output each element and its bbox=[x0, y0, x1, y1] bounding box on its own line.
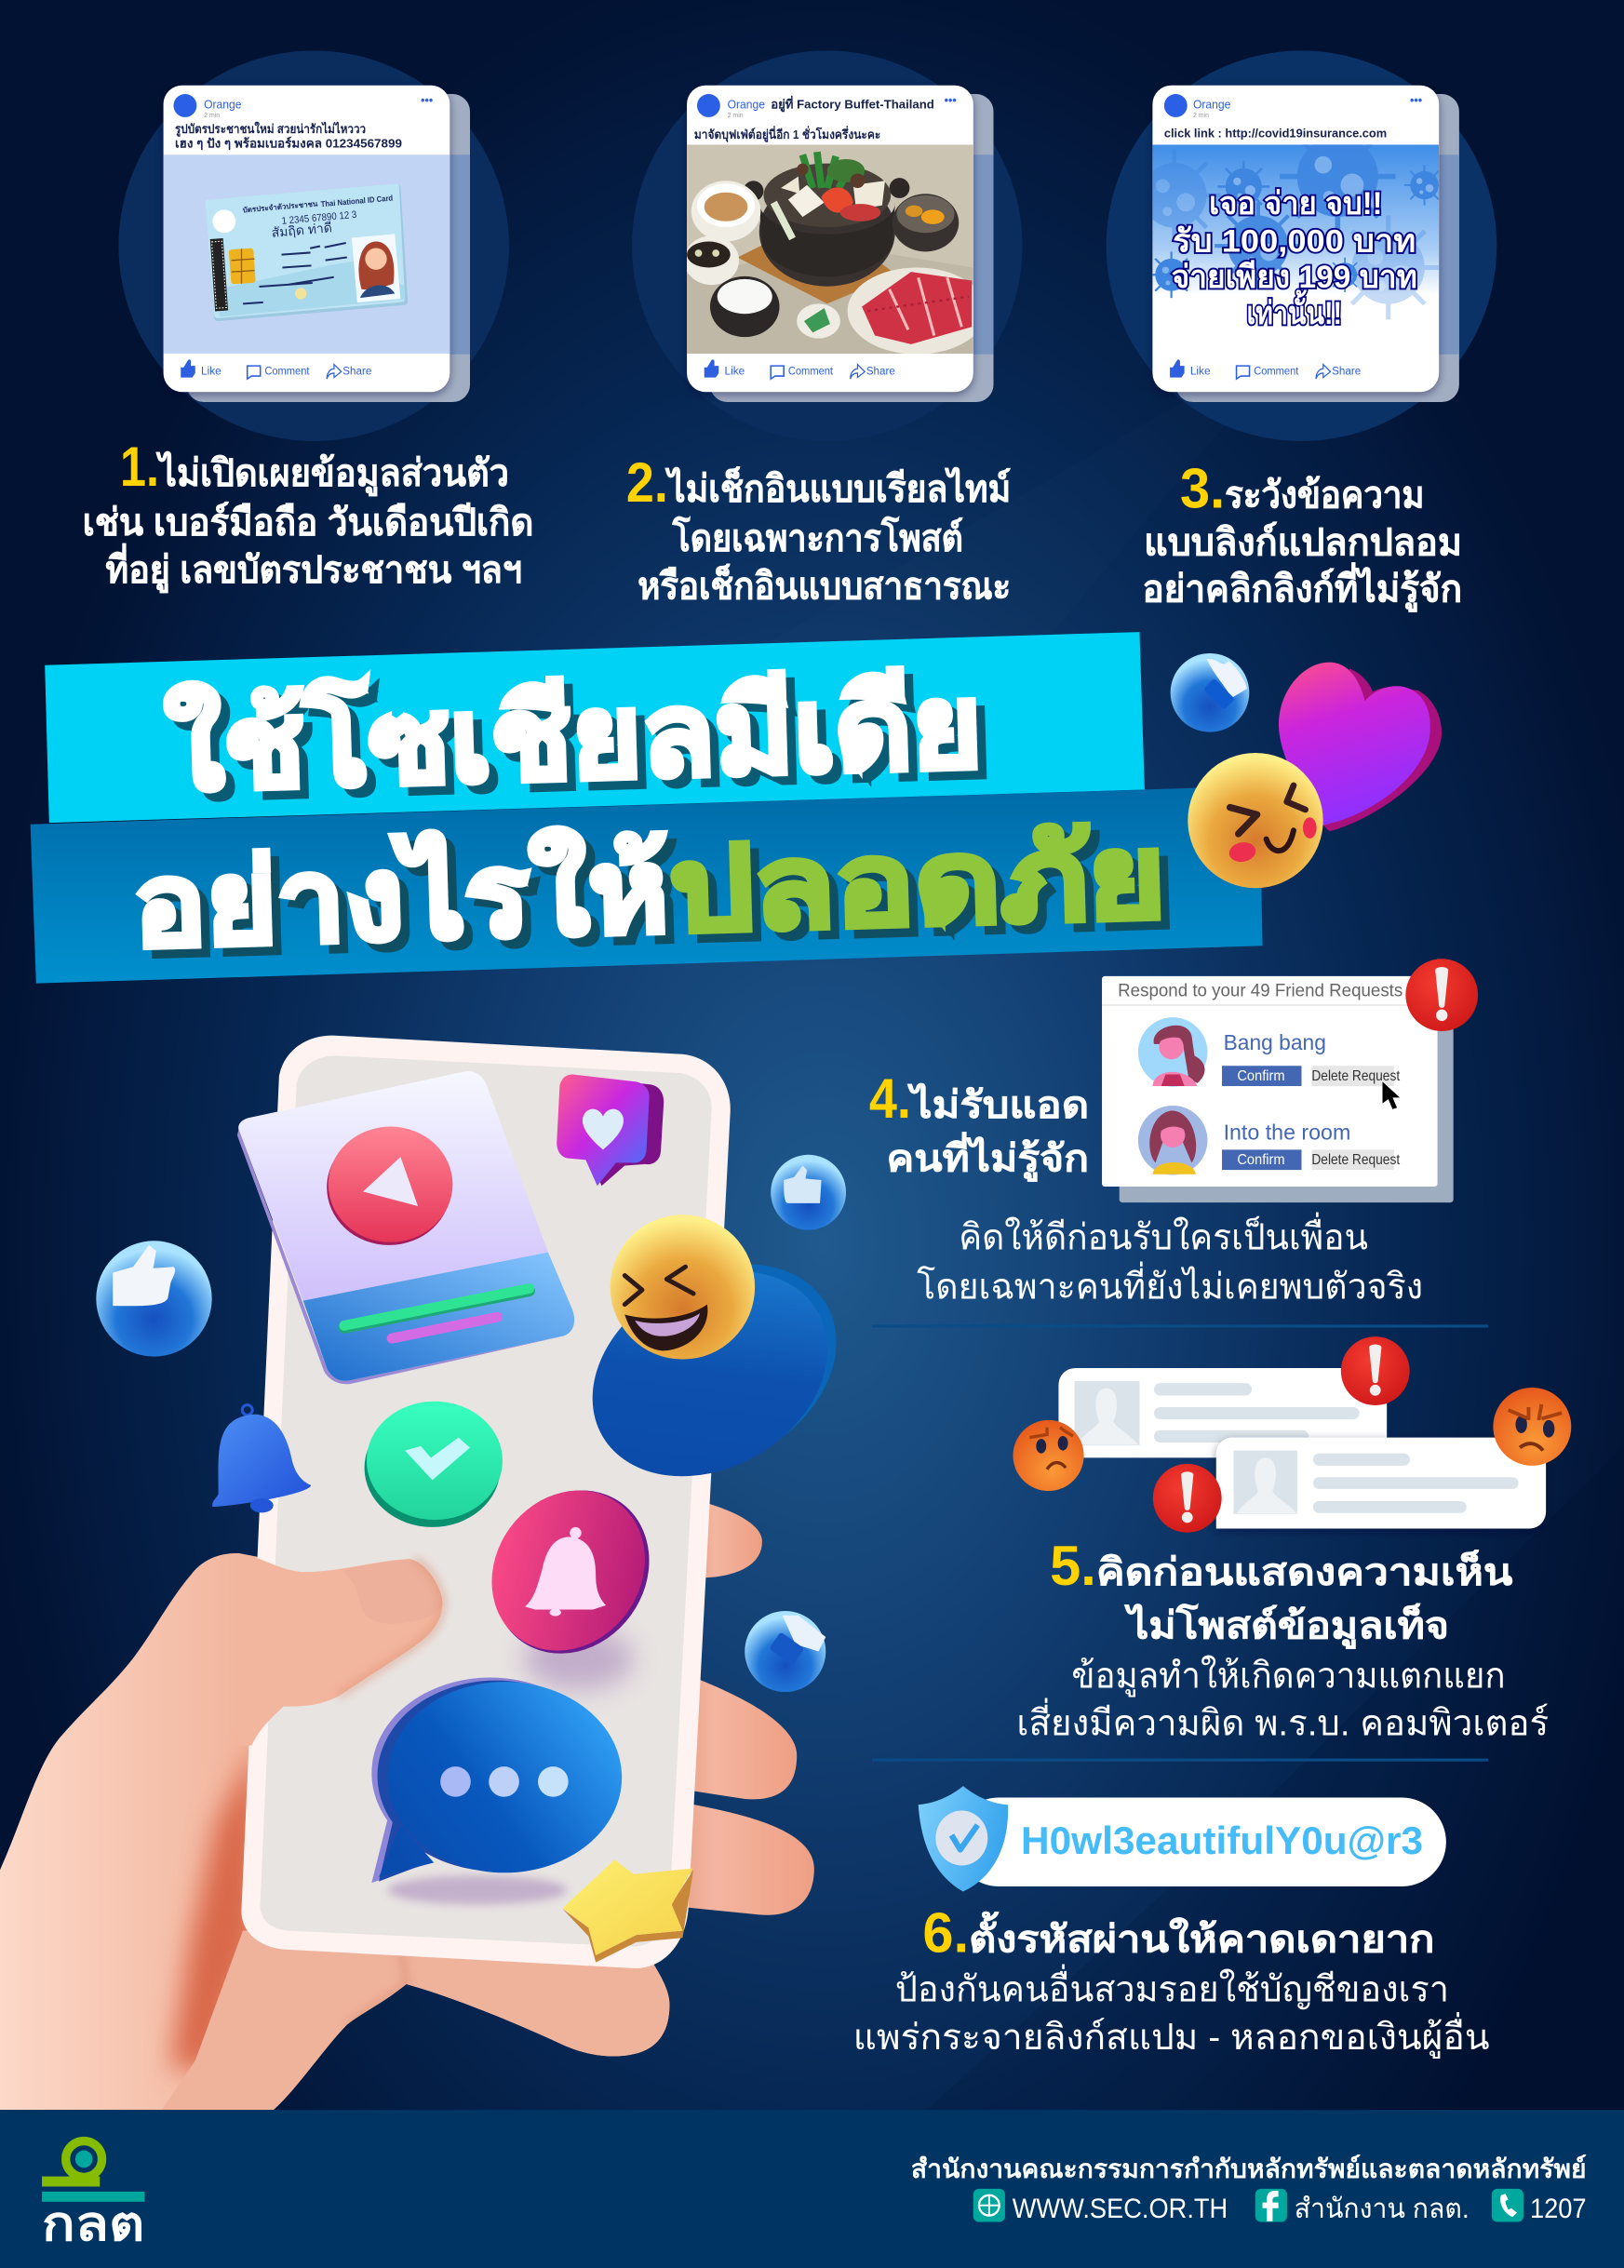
post card 2: food buffet post: Share bbox=[866, 365, 895, 377]
post card 3: fake insurance link post: 2 min bbox=[1193, 113, 1209, 119]
tip 5 text: ข้อมูลทำให้เกิดความแตกแยก bbox=[1071, 1655, 1506, 1697]
icon: facebook bbox=[1255, 2189, 1287, 2222]
icon: angry emoji bbox=[1493, 1388, 1571, 1466]
icon: like ball top right bbox=[771, 1155, 846, 1230]
tip 1 text bbox=[83, 435, 533, 594]
post card 3: fake insurance link post: click link : http://covid19insurance.com bbox=[1164, 127, 1387, 141]
password pill: H0wl3eautifulY0u@r3 bbox=[1021, 1818, 1423, 1862]
tip 5 text: ไม่โพสต์ข้อมูลเท็จ bbox=[1124, 1603, 1449, 1650]
icon: alert badge 1 bbox=[1341, 1336, 1410, 1405]
post card 3: fake insurance link post: Like bbox=[1190, 365, 1211, 377]
tip 5 text: คิดก่อนแสดงความเห็น bbox=[1096, 1549, 1513, 1593]
post card 2: food buffet post: Orange bbox=[728, 99, 765, 112]
tip 2 text: 2. bbox=[626, 450, 668, 514]
banner: title second line: อย่างไรให้ bbox=[131, 825, 670, 971]
post card 1: ID card post: Comment bbox=[264, 365, 310, 377]
avatar: first requester bbox=[1138, 1017, 1207, 1087]
tip 6 text: แพร่กระจายลิงก์สแปม - หลอกขอเงินผู้อื่น bbox=[853, 2012, 1489, 2059]
tip 5 text: เสี่ยงมีความผิด พ.ร.บ. คอมพิวเตอร์ bbox=[1016, 1698, 1549, 1744]
icon: national ID card: บัตรประจำตัวประชาชน bbox=[242, 199, 318, 214]
panel: friend requests: Bang bang bbox=[1224, 1030, 1326, 1054]
icon: blue bell bbox=[212, 1405, 311, 1512]
tip 1 text: ไม่เปิดเผยข้อมูลส่วนตัว bbox=[155, 450, 509, 497]
panel: friend requests: Confirm bbox=[1237, 1152, 1285, 1168]
post card 2: food buffet post: ••• bbox=[945, 94, 957, 107]
panel: friend requests: Delete Request bbox=[1311, 1152, 1401, 1168]
post card 3: fake insurance link post: เจอ จ่าย จบ!! bbox=[1209, 186, 1383, 221]
post card 1: ID card post: Like bbox=[201, 365, 221, 377]
tip 1 text: เช่น เบอร์มือถือ วันเดือนปีเกิด bbox=[83, 501, 533, 544]
logo bbox=[42, 2141, 144, 2250]
banner: title first line: ใช้โซเชียลมีเดีย bbox=[163, 660, 984, 814]
post card 2: food buffet post: อยู่ที่ Factory Buffet-Thailand bbox=[771, 95, 934, 113]
post card 3: fake insurance link post: เท่านั้น!! bbox=[1246, 289, 1342, 331]
post card 2: food buffet post: Like bbox=[724, 365, 745, 377]
footer organisation name: สำนักงานคณะกรรมการกำกับหลักทรัพย์และตลาดหลักทรัพย์ bbox=[911, 2154, 1587, 2183]
icon: sad emoji bbox=[1013, 1420, 1084, 1491]
post card 1: ID card post: 2 min bbox=[204, 113, 220, 119]
icon: blue oval with laughing emoji bbox=[556, 1215, 874, 1517]
illustration: smartphone bbox=[241, 1036, 731, 1968]
tip 4 heading: คนที่ไม่รู้จัก bbox=[887, 1132, 1089, 1183]
facebook name: สำนักงาน กลต. bbox=[1295, 2194, 1470, 2224]
illustration: virus banner bbox=[1152, 144, 1439, 320]
icon: national ID card: สัมฤิด ท่าดี bbox=[271, 220, 332, 240]
post card 3: fake insurance link post: Orange bbox=[1193, 99, 1230, 112]
post card 1: ID card post: Orange bbox=[204, 99, 242, 112]
tip 5 text bbox=[1016, 1534, 1549, 1744]
icon: phone bbox=[1492, 2189, 1523, 2222]
tip 3 text bbox=[1143, 456, 1462, 612]
illustration: hot pot meal bbox=[684, 144, 986, 355]
icon: alert badge friend requests bbox=[1405, 959, 1478, 1031]
panel: friend requests bbox=[1102, 976, 1454, 1202]
avatar: second requester bbox=[1138, 1106, 1207, 1175]
tip 3 text: ระวังข้อความ bbox=[1225, 473, 1425, 516]
comment card 2 bbox=[1216, 1438, 1546, 1528]
panel: friend requests: Respond to your 49 Friend Requests bbox=[1118, 981, 1403, 1001]
panel: friend requests: Delete Request bbox=[1311, 1068, 1401, 1084]
post card 3: fake insurance link post: Share bbox=[1332, 365, 1361, 377]
tip 6 text: ป้องกันคนอื่นสวมรอยใช้บัญชีของเรา bbox=[895, 1965, 1449, 2010]
post card 2: food buffet post: Comment bbox=[788, 365, 834, 377]
panel: friend requests: Confirm bbox=[1237, 1068, 1285, 1084]
icon: shield bbox=[919, 1786, 1008, 1891]
post card 3: fake insurance link post: Comment bbox=[1254, 365, 1299, 377]
tip 2 text: ไม่เช็กอินแบบเรียลไทม์ bbox=[664, 465, 1011, 510]
banner: title second line: อย่างไรให้ bbox=[141, 833, 679, 979]
post card 3: fake insurance link post: จ่ายเพียง 199 บาท bbox=[1172, 260, 1417, 295]
banner: title second line: ปลอดภัย bbox=[677, 821, 1176, 964]
post card 2: food buffet post: 2 min bbox=[728, 113, 744, 119]
icon: like ball near title bbox=[1171, 653, 1249, 732]
hotline number: 1207 bbox=[1530, 2194, 1587, 2224]
password pill bbox=[955, 1797, 1446, 1886]
circle behind post 2 bbox=[632, 50, 1023, 441]
post card 1: ID card post bbox=[164, 86, 470, 402]
tip 2 text: หรือเช็กอินแบบสาธารณะ bbox=[638, 562, 1011, 607]
tip 6 text bbox=[853, 1901, 1489, 2059]
icon: yellow star bbox=[562, 1859, 693, 1963]
tip 3 text: อย่าคลิกลิงก์ที่ไม่รู้จัก bbox=[1143, 561, 1462, 612]
illustration: fingers behind phone bbox=[673, 1499, 814, 1915]
icon: national ID card: Thai National ID Card bbox=[320, 193, 394, 208]
post card 1: ID card post: รูปบัตรประชาชนใหม่ สวยน่ารักไม่ไหววว bbox=[175, 121, 366, 137]
tip 2 text: โดยเฉพาะการโพสต์ bbox=[672, 516, 963, 559]
banner: title second line bbox=[31, 786, 1263, 984]
post card 1: ID card post: Share bbox=[342, 365, 371, 377]
panel: friend requests: Into the room bbox=[1224, 1120, 1350, 1144]
logo: กลต bbox=[42, 2197, 144, 2250]
website address: WWW.SEC.OR.TH bbox=[1013, 2194, 1228, 2224]
icon: purple heart bbox=[1279, 663, 1442, 831]
post card 3: fake insurance link post: รับ 100,000 บาท bbox=[1173, 223, 1416, 259]
circle behind post 1 bbox=[118, 50, 509, 441]
icon: mouse cursor bbox=[1383, 1081, 1400, 1109]
comment card 1 bbox=[1058, 1368, 1387, 1457]
tip 6 text: ตั้งรหัสผ่านให้คาดเดายาก bbox=[969, 1912, 1434, 1961]
post card 1: ID card post: เฮง ๆ ปัง ๆ พร้อมเบอร์มงคล 01234567899 bbox=[175, 137, 402, 151]
icon: national ID card bbox=[206, 183, 408, 321]
tip 4 heading bbox=[869, 1067, 1089, 1183]
post card 3: fake insurance link post bbox=[1128, 86, 1459, 402]
post card 2: food buffet post bbox=[684, 86, 994, 402]
tip 4 body bbox=[917, 1213, 1423, 1307]
footer bar bbox=[0, 2110, 1624, 2268]
icon: like ball left bbox=[96, 1241, 212, 1357]
tip 4 heading: 4. bbox=[869, 1067, 911, 1130]
icon: website bbox=[973, 2189, 1005, 2222]
post card 3: fake insurance link post: ••• bbox=[1410, 94, 1422, 107]
icon: like ball bottom right bbox=[745, 1611, 825, 1692]
tip 1 text: 1. bbox=[120, 435, 159, 498]
illustration: thumb bbox=[238, 1554, 442, 1746]
icon: green check button bbox=[365, 1402, 503, 1527]
post card 1: ID card post: ••• bbox=[421, 94, 433, 107]
illustration: palm bbox=[0, 1533, 694, 2112]
icon: chat bubble bbox=[371, 1678, 622, 1904]
banner: title first line: ใช้โซเชียลมีเดีย bbox=[172, 668, 993, 823]
tip 3 text: แบบลิงก์แปลกปลอม bbox=[1144, 521, 1462, 564]
tip 3 text: 3. bbox=[1180, 456, 1225, 519]
tip 4 heading: ไม่รับแอด bbox=[906, 1082, 1089, 1126]
banner: title second line: ปลอดภัย bbox=[668, 812, 1167, 956]
tip 5 text: 5. bbox=[1050, 1534, 1096, 1597]
icon: pink bell button bbox=[461, 1459, 681, 1691]
icon: national ID card: 1 2345 67890 12 3 bbox=[281, 209, 357, 227]
circle behind post 3 bbox=[1107, 50, 1496, 441]
icon: winking emoji bbox=[1188, 753, 1323, 888]
tip 4 body: โดยเฉพาะคนที่ยังไม่เคยพบตัวจริง bbox=[917, 1261, 1423, 1307]
post card 2: food buffet post: มาจัดบุฟเฟ่ต์อยู่นี่อีก 1 ชั่วโมงครึ่งนะคะ bbox=[694, 125, 880, 142]
tip 2 text bbox=[626, 450, 1011, 607]
icon: video card bbox=[237, 1071, 574, 1384]
banner: title first line bbox=[45, 632, 1145, 824]
tip 4 body: คิดให้ดีก่อนรับใครเป็นเพื่อน bbox=[959, 1213, 1368, 1258]
icon: heart notification bbox=[557, 1075, 664, 1186]
icon: alert badge 2 bbox=[1153, 1464, 1222, 1533]
tip 1 text: ที่อยู่ เลขบัตรประชาชน ฯลฯ bbox=[105, 543, 522, 594]
tip 6 text: 6. bbox=[922, 1901, 969, 1965]
